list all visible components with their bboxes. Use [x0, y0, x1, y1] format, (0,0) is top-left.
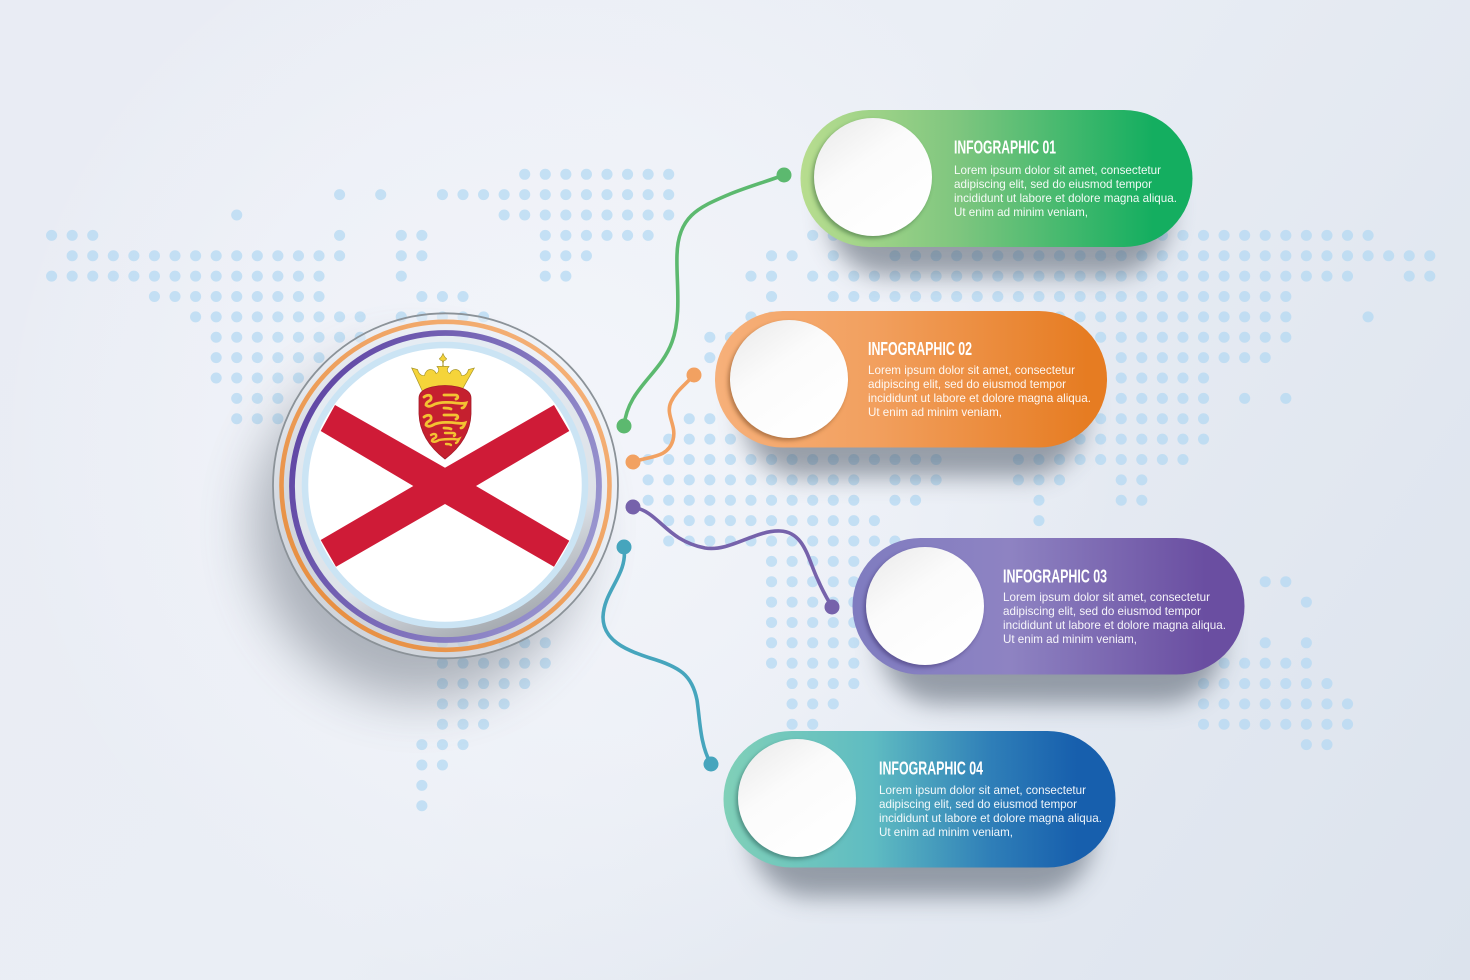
- blank disc: [864, 547, 984, 668]
- heading: INFOGRAPHIC 01: [954, 136, 1056, 158]
- coat of arms: [412, 354, 474, 459]
- body text: Lorem ipsum dolor sit amet, consectetur: [954, 163, 1161, 177]
- body text: incididunt ut labore et dolore magna aliqua.: [954, 191, 1177, 205]
- body text: adipiscing elit, sed do eiusmod tempor: [954, 177, 1152, 191]
- body text: Ut enim ad minim veniam,: [879, 825, 1013, 839]
- outer rings: [273, 313, 618, 658]
- body text: [868, 363, 1091, 419]
- flag red saltire: [321, 405, 569, 567]
- purple ring: [292, 333, 599, 640]
- panel shadow: [743, 341, 1085, 477]
- panel pill: [800, 110, 1192, 247]
- inner disc rim: [294, 335, 598, 639]
- shield: [419, 386, 471, 459]
- body text: Lorem ipsum dolor sit amet, consectetur: [879, 783, 1086, 797]
- heading: INFOGRAPHIC 03: [1003, 566, 1107, 586]
- blank disc: [728, 320, 848, 440]
- panel pill: [715, 311, 1107, 448]
- body text: Lorem ipsum dolor sit amet, consectetur: [1003, 590, 1210, 604]
- panel shadow: [880, 568, 1222, 704]
- panel pill: [724, 731, 1116, 868]
- panel shadow: [828, 140, 1170, 276]
- body text: incididunt ut labore et dolore magna aliqua.: [879, 811, 1102, 825]
- connector: purple line to panel 3: [626, 500, 840, 614]
- body text: Lorem ipsum dolor sit amet, consectetur: [868, 363, 1075, 377]
- panel pill: [852, 538, 1244, 674]
- light blue ring: [305, 345, 585, 625]
- panel: infographic 04: [724, 731, 1116, 897]
- panel: infographic 02: [715, 311, 1107, 477]
- body text: [1003, 590, 1226, 646]
- body text: incididunt ut labore et dolore magna aliqua.: [868, 391, 1091, 405]
- connector: orange line to panel 2: [626, 368, 702, 470]
- crown: [412, 354, 474, 392]
- panel: infographic 01: [800, 110, 1192, 276]
- heading: INFOGRAPHIC 04: [879, 758, 983, 778]
- body text: Ut enim ad minim veniam,: [954, 205, 1088, 219]
- body text: Ut enim ad minim veniam,: [1003, 632, 1137, 646]
- badge drop shadow: [253, 356, 583, 700]
- body text: incididunt ut labore et dolore magna aliqua.: [1003, 618, 1226, 632]
- lions: [424, 395, 466, 445]
- connector: teal line to panel 4: [603, 540, 718, 772]
- panel shadow: [751, 761, 1093, 897]
- body text: [954, 163, 1177, 219]
- flag badge: [253, 313, 618, 700]
- body text: adipiscing elit, sed do eiusmod tempor: [1003, 604, 1201, 618]
- connector: green line to panel 1: [616, 168, 792, 434]
- blank disc: [812, 118, 932, 238]
- panel: infographic 03: [852, 538, 1244, 704]
- body text: adipiscing elit, sed do eiusmod tempor: [868, 377, 1066, 391]
- heading: INFOGRAPHIC 02: [868, 338, 972, 359]
- dotted world map: [52, 174, 1430, 806]
- body text: [879, 783, 1102, 839]
- blank disc: [736, 739, 856, 860]
- body text: Ut enim ad minim veniam,: [868, 405, 1002, 419]
- body text: adipiscing elit, sed do eiusmod tempor: [879, 797, 1077, 811]
